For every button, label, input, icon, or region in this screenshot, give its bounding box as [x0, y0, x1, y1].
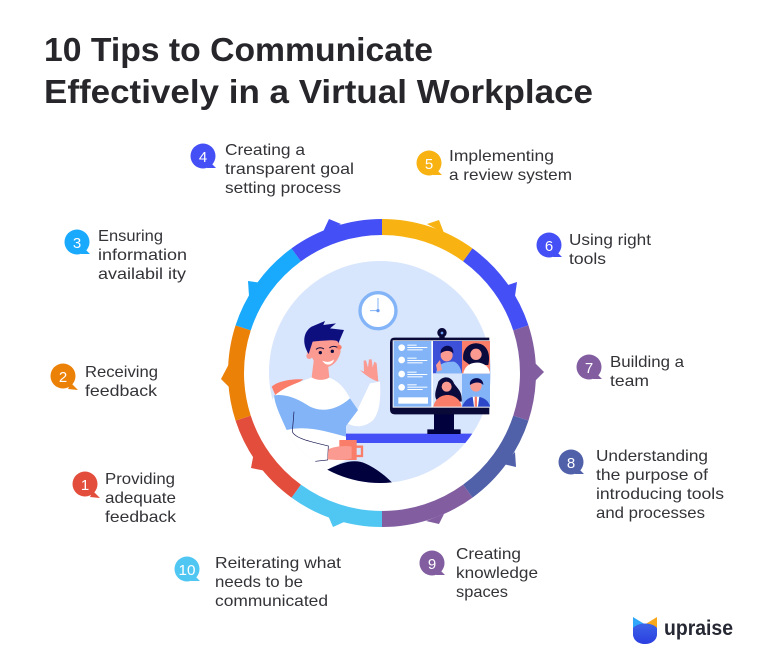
tip 7: 7: [585, 360, 593, 377]
hair: [304, 321, 344, 354]
video tile 1: [433, 341, 462, 373]
tip 8: 8: [567, 455, 575, 472]
tip 1: 1: [81, 477, 89, 494]
arm line: [292, 412, 328, 461]
tip 10: communicated: [215, 593, 328, 610]
tip 3: information: [98, 247, 187, 264]
tip 8: Understanding: [596, 448, 708, 465]
tip 10: Reiterating what: [215, 555, 342, 572]
hand: [328, 446, 352, 460]
illustration: person at desk: [263, 321, 477, 490]
face: [307, 337, 341, 367]
title: [44, 31, 593, 110]
tip 8: [558, 448, 724, 522]
illustration circle: [269, 261, 491, 483]
tip 7: Building a: [610, 354, 684, 371]
tip 2: 2: [59, 369, 67, 386]
mug: [355, 447, 362, 456]
ring tips: [221, 219, 544, 527]
tip 2: Receiving: [85, 364, 158, 381]
chair: [272, 379, 304, 395]
tip 5: Implementing: [449, 148, 554, 165]
tip 7: [576, 354, 684, 390]
tip 10: needs to be: [215, 574, 303, 591]
panel list: [394, 341, 431, 407]
title: Effectively in a Virtual Workplace: [44, 73, 593, 110]
tip 9: Creating: [456, 546, 521, 563]
eyes and mouth: [316, 346, 337, 365]
tip 3: Ensuring: [98, 228, 163, 245]
tip 4: setting process: [225, 180, 341, 197]
title: 10 Tips to Communicate: [44, 31, 433, 68]
tip 4: [190, 142, 354, 197]
video tile 2: [462, 341, 490, 373]
sweater band: [274, 395, 358, 437]
video tile 3: [433, 374, 462, 407]
tip 10: [174, 555, 342, 610]
sweater: [272, 378, 380, 470]
tip 4: Creating a: [225, 142, 305, 159]
tip 6: 6: [545, 238, 553, 255]
tip 9: 9: [428, 556, 436, 573]
video tile 4: [462, 374, 490, 407]
upraise logo: upraise: [664, 617, 733, 640]
tip 3: [64, 228, 187, 283]
tip 9: [419, 546, 538, 601]
tip 7: team: [610, 373, 649, 390]
tip 3: 3: [73, 235, 81, 252]
tip 9: spaces: [456, 584, 508, 601]
tip 8: and processes: [596, 505, 705, 522]
tip 2: [50, 364, 158, 400]
stand: [427, 412, 461, 434]
tip 2: feedback: [85, 383, 158, 400]
webcam: [437, 328, 447, 339]
tip 5: a review system: [449, 167, 572, 184]
tip 1: feedback: [105, 509, 177, 526]
tip 3: availabil ity: [98, 266, 186, 283]
tip 9: knowledge: [456, 565, 538, 582]
tip 10: 10: [178, 562, 196, 579]
tip 4: transparent goal: [225, 161, 354, 178]
tip 1: adequate: [105, 490, 176, 507]
illustration: clock: [360, 293, 396, 329]
tip 1: [72, 471, 177, 526]
tip 1: Providing: [105, 471, 175, 488]
tip 8: introducing tools: [596, 486, 724, 503]
tip 6: tools: [569, 251, 606, 268]
tip 5: [416, 148, 572, 184]
leg: [327, 461, 392, 483]
segmented ring: [236, 227, 528, 519]
illustration: monitor: [390, 328, 490, 434]
tip 8: the purpose of: [596, 467, 709, 484]
desk: [345, 434, 477, 443]
tip 6: [536, 232, 652, 268]
tip 6: Using right: [569, 232, 652, 249]
neck: [312, 358, 329, 380]
screen: [390, 338, 489, 414]
tip 5: 5: [425, 156, 433, 173]
tip 4: 4: [199, 149, 207, 166]
waving hand: [360, 359, 378, 382]
upraise logo: [633, 617, 733, 644]
